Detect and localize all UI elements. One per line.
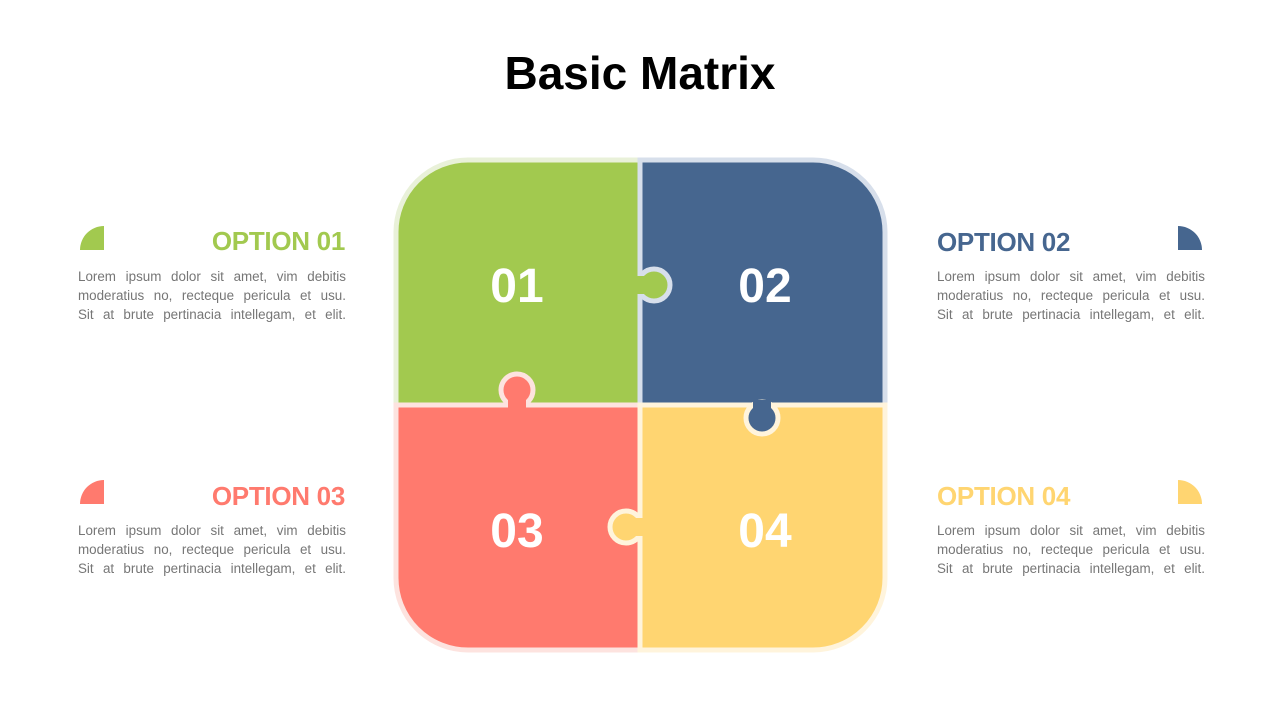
text option 02: intellegam, [1090, 307, 1154, 322]
text option 04: et [1164, 561, 1175, 576]
piece 02 [640, 160, 885, 405]
text option 01: intellegam, [231, 307, 295, 322]
text option 01: Lorem [78, 269, 116, 284]
title: Basic Matrix [504, 47, 776, 99]
text option 04: moderatius [937, 542, 1003, 557]
text option 02 [937, 269, 1205, 322]
text option 04: brute [982, 561, 1013, 576]
piece 01 [396, 160, 640, 405]
text option 04: elit. [1184, 561, 1205, 576]
text option 03: intellegam, [231, 561, 295, 576]
text option 04 [937, 523, 1205, 576]
tab blue [746, 400, 778, 434]
text option 02: brute [982, 307, 1013, 322]
text option 02: Lorem [937, 269, 975, 284]
text option 01: et [305, 307, 316, 322]
numbers [490, 260, 792, 558]
numbers: 04 [738, 505, 792, 558]
text option 03: vim [277, 523, 298, 538]
piece 04 [640, 405, 885, 650]
text option 02: dolor [1030, 269, 1060, 284]
text option 01: no, [154, 288, 172, 303]
text option 01: debitis [307, 269, 346, 284]
text option 03: no, [154, 542, 172, 557]
tab yellow [610, 511, 646, 543]
text option 04: intellegam, [1090, 561, 1154, 576]
text option 01: brute [123, 307, 154, 322]
text option 01: amet, [234, 269, 267, 284]
text option 01: vim [277, 269, 298, 284]
text option 01: Sit [78, 307, 94, 322]
text option 03: sit [210, 523, 224, 538]
icon: quarter 01 [80, 226, 104, 250]
text option 03: ipsum [126, 523, 161, 538]
heading option 02: OPTION 02 [937, 227, 1070, 257]
text option 02: recteque [1041, 288, 1093, 303]
text option 04: et [1159, 542, 1170, 557]
text option 02: pericula [1103, 288, 1149, 303]
text option 02: Sit [937, 307, 953, 322]
text option 04: no, [1013, 542, 1031, 557]
text option 04: Sit [937, 561, 953, 576]
text option 01: dolor [171, 269, 201, 284]
icon: quarter 03 [80, 480, 104, 504]
text option 02: at [962, 307, 973, 322]
text option 03: et [300, 542, 311, 557]
text option 04: at [962, 561, 973, 576]
text option 04: Lorem [937, 523, 975, 538]
icon: quarter 02 [1178, 226, 1202, 250]
text option 03: pericula [244, 542, 290, 557]
text option 02: amet, [1093, 269, 1126, 284]
text option 04: debitis [1166, 523, 1205, 538]
text option 04: sit [1070, 523, 1083, 538]
text option 01: at [103, 307, 114, 322]
numbers: 03 [490, 505, 544, 558]
icon: quarter 04 [1178, 480, 1202, 504]
text option 03 [78, 523, 346, 576]
text option 01: ipsum [126, 269, 161, 284]
text option 02: ipsum [985, 269, 1020, 284]
text option 01: recteque [182, 288, 234, 303]
text option 02: sit [1070, 269, 1083, 284]
text option 02: vim [1136, 269, 1157, 284]
text option 03: usu. [321, 542, 346, 557]
text option 01 [78, 269, 346, 322]
text option 03: et [305, 561, 316, 576]
text option 04: pertinacia [1022, 561, 1080, 576]
text option 01: pericula [244, 288, 290, 303]
text option 02: debitis [1166, 269, 1205, 284]
text option 03: moderatius [78, 542, 144, 557]
text option 02: no, [1013, 288, 1031, 303]
text option 02: et [1159, 288, 1170, 303]
text option 03: elit. [325, 561, 346, 576]
text option 03: brute [123, 561, 154, 576]
text option 02: moderatius [937, 288, 1003, 303]
text option 03: amet, [234, 523, 267, 538]
text option 01: usu. [321, 288, 346, 303]
text option 04: pericula [1103, 542, 1149, 557]
text option 03: dolor [171, 523, 201, 538]
text option 02: usu. [1180, 288, 1205, 303]
text option 03: Lorem [78, 523, 116, 538]
text option 01: et [300, 288, 311, 303]
heading option 03: OPTION 03 [212, 481, 345, 511]
text option 04: ipsum [985, 523, 1020, 538]
text option 01: elit. [325, 307, 346, 322]
heading option 04: OPTION 04 [937, 481, 1070, 511]
tab red [501, 374, 533, 410]
numbers: 02 [738, 260, 792, 313]
heading option 01: OPTION 01 [212, 226, 345, 256]
text option 03: recteque [182, 542, 234, 557]
text option 01: pertinacia [163, 307, 221, 322]
piece 03 [396, 405, 640, 650]
text option 01: moderatius [78, 288, 144, 303]
text option 04: dolor [1030, 523, 1060, 538]
text option 03: at [103, 561, 114, 576]
text option 01: sit [210, 269, 224, 284]
text option 03: debitis [307, 523, 346, 538]
text option 04: vim [1136, 523, 1157, 538]
text option 02: elit. [1184, 307, 1205, 322]
numbers: 01 [490, 260, 544, 313]
text option 03: pertinacia [163, 561, 221, 576]
text option 04: amet, [1093, 523, 1126, 538]
tab green [634, 269, 670, 301]
text option 02: pertinacia [1022, 307, 1080, 322]
text option 04: recteque [1041, 542, 1093, 557]
text option 02: et [1164, 307, 1175, 322]
text option 03: Sit [78, 561, 94, 576]
text option 04: usu. [1180, 542, 1205, 557]
